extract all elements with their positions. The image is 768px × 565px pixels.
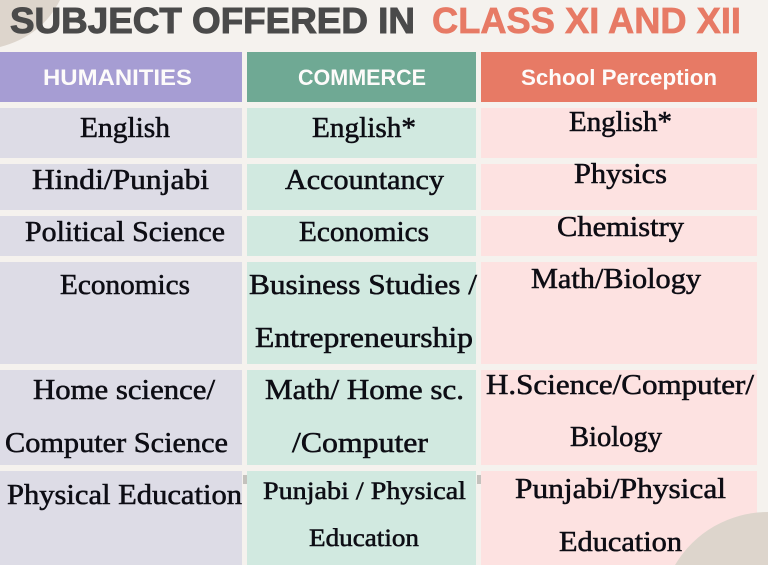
subject cells: school perception: Education xyxy=(559,527,682,558)
subject cells: commerce: Math/ Home sc. xyxy=(265,375,464,406)
subject cells: school perception: Chemistry xyxy=(557,212,685,243)
title xyxy=(10,0,741,41)
subject cells: humanities: English xyxy=(80,113,170,144)
subject cells: commerce: /Computer xyxy=(292,428,429,459)
subject cells: humanities: Physical Education xyxy=(7,480,242,511)
subject cells: humanities: Computer Science xyxy=(5,428,228,459)
header: school perception xyxy=(481,52,757,102)
panel: commerce column xyxy=(243,52,481,565)
header: commerce xyxy=(247,52,476,102)
decorative circle: bottom right xyxy=(675,512,768,565)
panel: school perception column xyxy=(481,52,768,565)
decorative circle: top left xyxy=(0,0,60,47)
header: humanities: HUMANITIES xyxy=(43,65,192,90)
subject cells: school perception: Math/Biology xyxy=(531,264,702,295)
subject cells: commerce: Entrepreneurship xyxy=(255,323,473,354)
subject cells: humanities: Political Science xyxy=(25,217,225,248)
header: humanities xyxy=(0,52,242,102)
header: commerce: COMMERCE xyxy=(298,65,426,90)
subject cells: school perception: Biology xyxy=(570,422,663,453)
subject cells: school perception: Punjabi/Physical xyxy=(515,474,726,505)
subject cells: school perception xyxy=(481,107,768,565)
subject cells: commerce: English* xyxy=(312,113,416,144)
subject cells: humanities: Hindi/Punjabi xyxy=(32,165,209,196)
subject cells: commerce: Economics xyxy=(299,217,429,248)
subject cells: commerce: Accountancy xyxy=(285,165,445,196)
subject cells: school perception: H.Science/Computer/ xyxy=(486,370,754,401)
subject cells: school perception: English* xyxy=(569,107,672,138)
header: school perception: School Perception xyxy=(521,65,717,90)
subject cells: commerce xyxy=(243,108,481,565)
title: CLASS XI AND XII xyxy=(432,0,741,41)
subject cells: commerce: Education xyxy=(309,525,420,552)
subject cells: school perception: Physics xyxy=(574,159,667,190)
subject cells: humanities xyxy=(0,108,242,565)
title: SUBJECT OFFERED IN xyxy=(10,0,415,41)
subject cells: commerce: Business Studies / xyxy=(249,270,477,301)
subject cells: humanities: Economics xyxy=(60,270,190,301)
subject cells: humanities: Home science/ xyxy=(33,375,215,406)
panel: humanities column xyxy=(0,52,242,565)
subject cells: commerce: Punjabi / Physical xyxy=(263,478,466,505)
